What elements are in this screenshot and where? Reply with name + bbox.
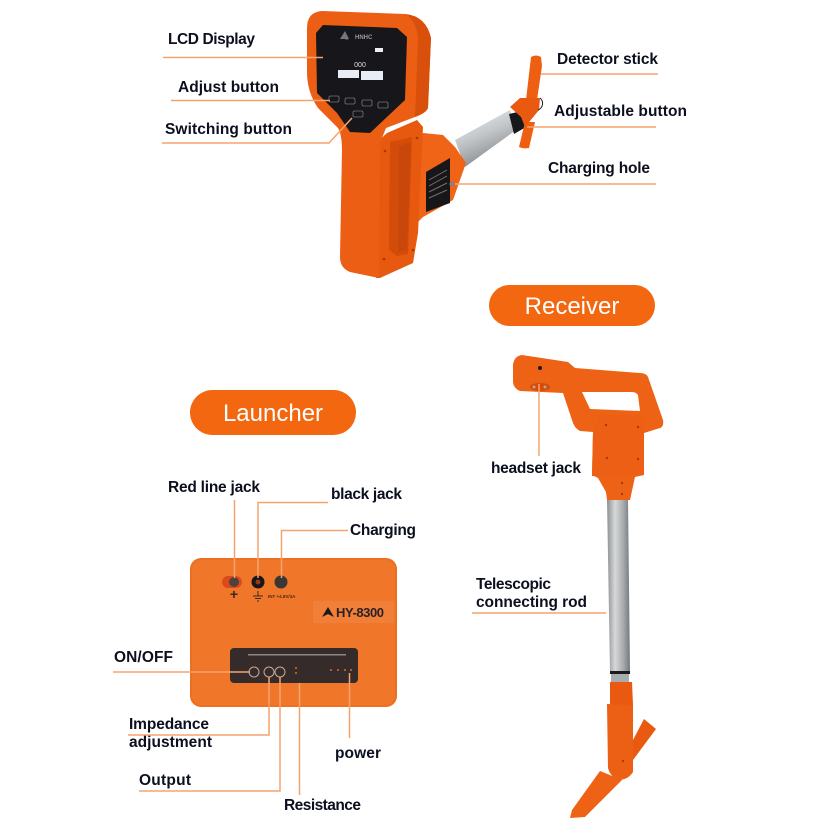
telescopic rod bbox=[455, 110, 516, 167]
rear paddle bbox=[633, 719, 656, 760]
callout: black jack: black jack bbox=[331, 486, 402, 503]
charging spec text: INT +4.8V/3A bbox=[268, 594, 296, 599]
callout: Detector stick bbox=[541, 51, 658, 74]
callout: Impedance adjustment: Impedance bbox=[129, 716, 209, 733]
callout: Telescopic connecting rod bbox=[472, 576, 606, 613]
callout: Telescopic connecting rod: Telescopic bbox=[476, 576, 551, 593]
callout: Switching button: Switching button bbox=[165, 121, 292, 138]
callout: Adjustable button: Adjustable button bbox=[554, 103, 687, 120]
heading: Receiver bbox=[489, 285, 655, 326]
handset grip back bbox=[376, 120, 423, 278]
launcher case bbox=[190, 558, 397, 707]
control panel bbox=[230, 648, 358, 683]
plate screws bbox=[605, 424, 639, 762]
callout: headset jack: headset jack bbox=[491, 460, 581, 477]
black jack bbox=[252, 576, 264, 588]
callout: Output bbox=[139, 677, 280, 791]
callout: Output: Output bbox=[139, 772, 191, 789]
screen logo bbox=[340, 31, 373, 41]
model badge: HY-8300 bbox=[336, 605, 384, 620]
handset side shading bbox=[405, 14, 431, 117]
charging jack bbox=[274, 576, 288, 588]
callout: LCD Display: LCD Display bbox=[168, 31, 255, 48]
callout: headset jack bbox=[491, 384, 581, 477]
stick connector bbox=[510, 98, 540, 127]
charging hole bbox=[450, 182, 454, 186]
mount plate bbox=[592, 415, 644, 476]
grip screws bbox=[383, 137, 418, 260]
callout: Impedance adjustment: adjustment bbox=[129, 734, 212, 751]
heading: Launcher bbox=[190, 390, 356, 435]
callout: Adjust button: Adjust button bbox=[178, 79, 279, 96]
rod end knob bbox=[509, 111, 526, 134]
callout: black jack bbox=[258, 486, 402, 578]
handle body bbox=[513, 355, 663, 500]
display bars bbox=[338, 70, 383, 80]
module label bbox=[426, 158, 450, 212]
callout: Red line jack: Red line jack bbox=[168, 479, 260, 496]
front paddle bbox=[570, 771, 622, 818]
black screen panel bbox=[316, 25, 407, 133]
handset body bbox=[307, 11, 431, 278]
callout: Charging bbox=[282, 522, 416, 578]
callout: ON/OFF: ON/OFF bbox=[114, 649, 173, 666]
callout: Charging: Charging bbox=[350, 522, 416, 539]
battery indicator bbox=[375, 48, 383, 52]
rear module bbox=[412, 133, 466, 228]
launcher device bbox=[190, 558, 397, 707]
callout: Charging hole: Charging hole bbox=[548, 160, 650, 177]
telescopic connecting rod bbox=[607, 498, 630, 672]
adjustable ring bbox=[538, 98, 543, 110]
heading: Receiver: Receiver bbox=[525, 293, 619, 320]
detector stick bbox=[519, 56, 542, 148]
lower sleeve bbox=[610, 682, 633, 705]
lower bracket bbox=[607, 704, 633, 780]
ground symbol bbox=[253, 591, 263, 601]
jack opening bbox=[538, 366, 542, 370]
red jack bbox=[222, 576, 242, 588]
callout: Resistance: Resistance bbox=[284, 797, 361, 814]
underside speaker holes bbox=[530, 383, 550, 391]
keypad buttons bbox=[329, 96, 388, 117]
screen logo: HNHC bbox=[355, 35, 373, 41]
callout: Impedance adjustment bbox=[128, 677, 269, 751]
receiver locator photo bbox=[513, 355, 663, 818]
receiver handset photo bbox=[307, 11, 543, 278]
grip opening bbox=[389, 137, 412, 256]
callout: Resistance bbox=[284, 683, 361, 814]
model badge bbox=[313, 601, 394, 623]
callout: Red line jack bbox=[168, 479, 260, 578]
callout: ON/OFF bbox=[113, 649, 250, 672]
callout: Detector stick: Detector stick bbox=[557, 51, 658, 68]
callout: power bbox=[335, 673, 381, 762]
plus sign: + bbox=[230, 586, 238, 602]
callout: Telescopic connecting rod: connecting rod bbox=[476, 594, 587, 611]
callout: power: power bbox=[335, 745, 381, 762]
heading: Launcher: Launcher bbox=[223, 400, 323, 427]
rod black collar bbox=[610, 671, 630, 674]
callout: Switching button bbox=[162, 118, 352, 143]
reading 000: 000 bbox=[354, 62, 366, 69]
